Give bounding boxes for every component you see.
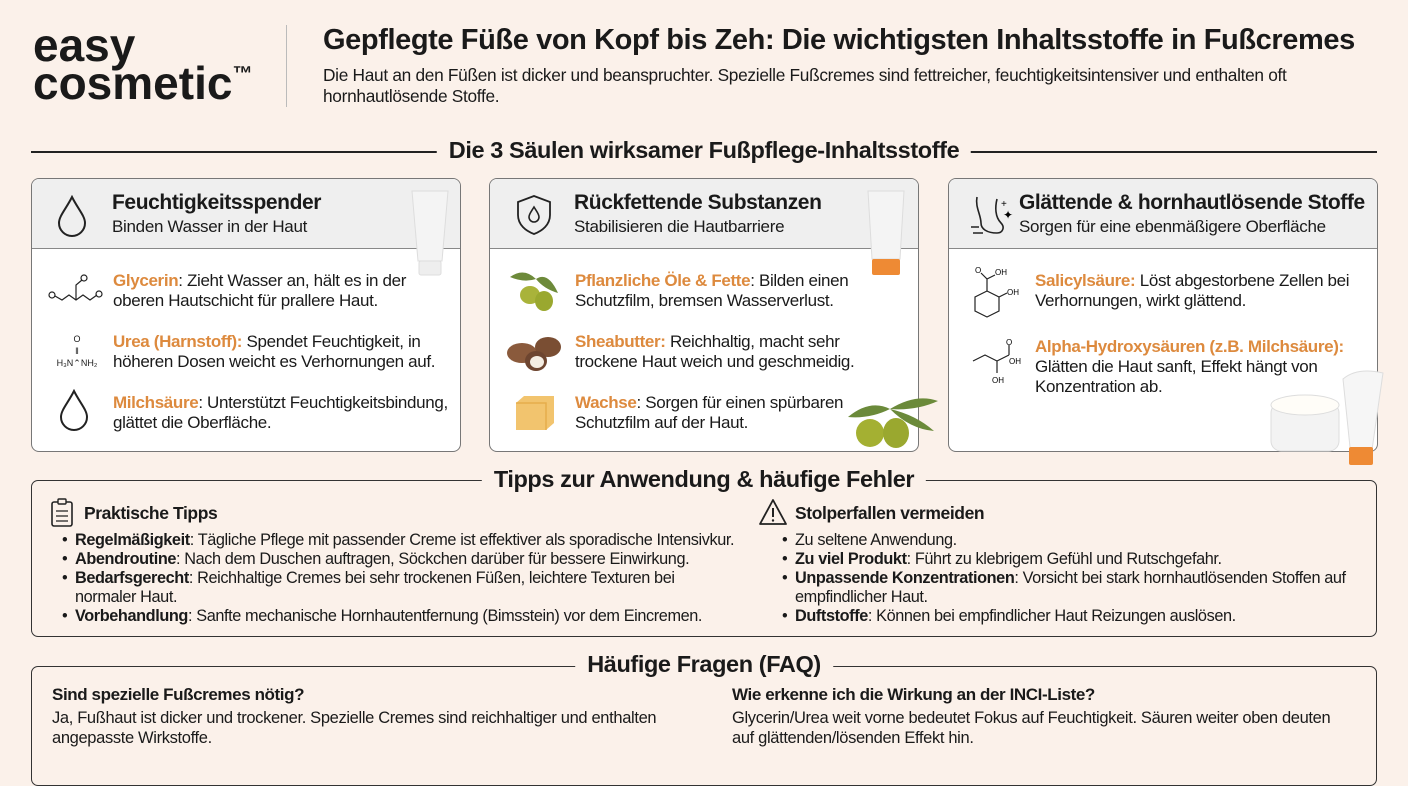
tips right column	[759, 499, 1346, 625]
icon: foot	[971, 196, 1013, 234]
icon: cream jar and tube	[1270, 370, 1384, 465]
item: glycerin: Glycerin: Zieht Wasser an, hält es in der	[113, 271, 406, 290]
icon: clipboard	[51, 498, 73, 527]
icon: tube orange	[868, 190, 904, 275]
icon: olives	[848, 398, 938, 448]
item: milchsäure	[113, 393, 448, 432]
panel: Feuchtigkeitsspender: Binden Wasser in der Haut	[112, 217, 307, 236]
text: Abendroutine: Nach dem Duschen auftragen, Söckchen darüber für bessere Einwirkung.	[75, 550, 689, 568]
item: sheabutter: Sheabutter: Reichhaltig, macht sehr	[575, 332, 840, 351]
text: Duftstoffe: Können bei empfindlicher Haut Reizungen auslösen.	[795, 607, 1236, 625]
icon: tube	[412, 190, 448, 276]
icon: shield	[517, 195, 551, 235]
faq 1: Sind spezielle Fußcremes nötig?	[52, 685, 304, 704]
text: Zu viel Produkt: Führt zu klebrigem Gefühl und Rutschgefahr.	[795, 550, 1222, 568]
text: Praktische Tipps	[84, 503, 217, 523]
item: urea: höheren Dosen weicht es Verhornungen auf.	[113, 352, 435, 371]
item: öle: Pflanzliche Öle & Fette: Bilden einen	[575, 271, 848, 290]
text: Stolperfallen vermeiden	[795, 503, 984, 523]
section heading: FAQ: Häufige Fragen (FAQ)	[587, 651, 821, 677]
panel: tips	[31, 480, 1377, 637]
faq 1	[52, 685, 656, 747]
item: milchsäure: glättet die Oberfläche.	[113, 413, 271, 432]
faq 1: Ja, Fußhaut ist dicker und trockener. Spezielle Cremes sind reichhaltiger und enthalten	[52, 709, 656, 727]
panel: Rückfettende Substanzen: Rückfettende Substanzen	[574, 191, 822, 214]
item: salicylsäure: Verhornungen, wirkt glättend.	[1035, 291, 1246, 310]
panel: Glättende Stoffe	[948, 178, 1378, 452]
logo: easy	[33, 19, 135, 71]
item: AHA	[1035, 337, 1344, 396]
text: Zu seltene Anwendung.	[795, 531, 957, 549]
panel: Feuchtigkeitsspender: O	[73, 334, 80, 344]
panel: FAQ	[31, 666, 1377, 786]
text: Vorbehandlung: Sanfte mechanische Hornhautentfernung (Bimsstein) vor dem Eincremen.	[75, 607, 702, 625]
faq 2: auf glättenden/lösenden Effekt hin.	[732, 729, 974, 747]
panel: Feuchtigkeitsspender	[31, 178, 461, 452]
panel: Glättende Stoffe: Glättende & hornhautlösende Stoffe	[1019, 191, 1365, 214]
text: Bedarfsgerecht: Reichhaltige Cremes bei sehr trockenen Füßen, leichtere Texturen bei	[75, 569, 675, 587]
faq 1: angepasste Wirkstoffe.	[52, 729, 212, 747]
text: Unpassende Konzentrationen: Vorsicht bei stark hornhautlösenden Stoffen auf	[795, 569, 1346, 587]
logo	[33, 19, 252, 109]
faq 2: Wie erkenne ich die Wirkung an der INCI-Liste?	[732, 685, 1095, 704]
panel: Glättende Stoffe: Sorgen für eine ebenmäßigere Oberfläche	[1019, 217, 1326, 236]
icon: foot: ✦	[1003, 208, 1013, 222]
panel: Feuchtigkeitsspender: H₃N⌃NH₂	[57, 358, 97, 368]
item: glycerin	[113, 271, 406, 310]
item: urea: Urea (Harnstoff): Spendet Feuchtigkeit, in	[113, 332, 420, 351]
title: Gepflegte Füße von Kopf bis Zeh: Die wichtigsten Inhaltsstoffe in Fußcremes	[323, 24, 1355, 56]
item: milchsäure: Milchsäure: Unterstützt Feuchtigkeitsbindung,	[113, 393, 448, 412]
panel: Feuchtigkeitsspender: Feuchtigkeitsspender	[112, 191, 321, 214]
subtitle: Die Haut an den Füßen ist dicker und beanspruchter. Spezielle Fußcremes sind fettreicher, feuchtigkeitsintensiver und enthalten oft hornhautlösende Stoffe.	[323, 65, 1287, 106]
item: öle	[575, 271, 848, 310]
panel: Glättende Stoffe: OH	[1007, 288, 1019, 297]
item: wachse	[575, 393, 843, 432]
text: Regelmäßigkeit: Tägliche Pflege mit passender Creme ist effektiver als sporadische Intensivkur.	[75, 531, 734, 549]
item: salicylsäure	[1035, 271, 1349, 310]
item: glycerin: oberen Hautschicht für prallere Haut.	[113, 291, 378, 310]
item: sheabutter: trockene Haut weich und geschmeidig.	[575, 352, 854, 371]
item: salicylsäure: Salicylsäure: Löst abgestorbene Zellen bei	[1035, 271, 1349, 290]
panel: Glättende Stoffe: OH	[992, 376, 1004, 385]
item: AHA: Glätten die Haut sanft, Effekt hängt von	[1035, 357, 1317, 376]
section heading: pillars: Die 3 Säulen wirksamer Fußpflege-Inhaltsstoffe	[449, 137, 959, 163]
item: urea	[113, 332, 435, 371]
panel: Glättende Stoffe: OH	[1009, 357, 1021, 366]
icon: warning	[759, 499, 787, 525]
item: öle: Schutzfilm, bremsen Wasserverlust.	[575, 291, 834, 310]
panel: Rückfettende Substanzen: Stabilisieren die Hautbarriere	[574, 217, 784, 236]
panel: Rückfettende Substanzen	[489, 178, 919, 452]
item: AHA: Alpha-Hydroxysäuren (z.B. Milchsäure):	[1035, 337, 1344, 356]
item: sheabutter	[575, 332, 854, 371]
panel: Feuchtigkeitsspender: ‖	[75, 346, 79, 356]
faq 2	[732, 685, 1330, 747]
item: wachse: Wachse: Sorgen für einen spürbaren	[575, 393, 843, 412]
text: empfindlicher Haut.	[795, 588, 928, 606]
tips left column	[51, 498, 734, 625]
item: AHA: Konzentration ab.	[1035, 377, 1162, 396]
panel: Glättende Stoffe: O	[975, 266, 981, 275]
panel: Glättende Stoffe: OH	[995, 268, 1007, 277]
text: normaler Haut.	[75, 588, 177, 606]
section heading: tips: Tipps zur Anwendung & häufige Fehler	[494, 466, 914, 492]
faq 2: Glycerin/Urea weit vorne bedeutet Fokus auf Feuchtigkeit. Säuren weiter oben deuten	[732, 709, 1330, 727]
icon: foot: +	[1001, 199, 1007, 210]
logo: cosmetic™	[33, 57, 252, 109]
item: wachse: Schutzfilm auf der Haut.	[575, 413, 748, 432]
icon: drop	[58, 195, 86, 237]
